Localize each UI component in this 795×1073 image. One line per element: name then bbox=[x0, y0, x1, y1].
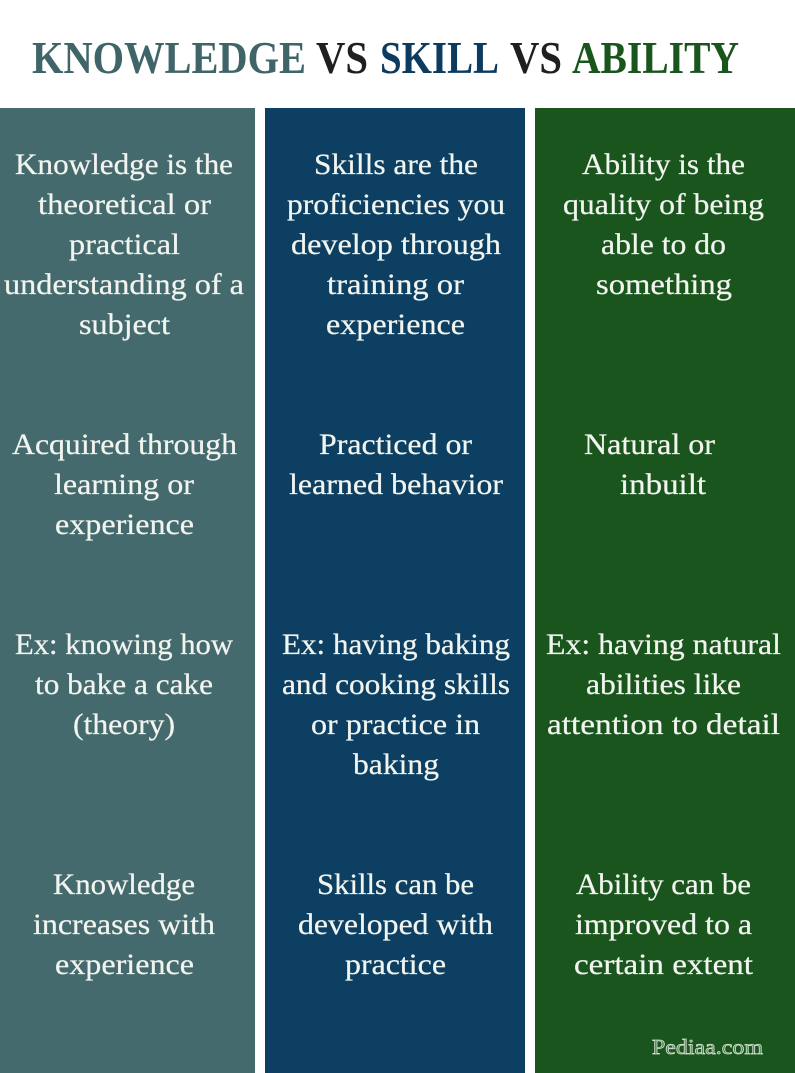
knowledge growth bbox=[33, 869, 215, 981]
ability example: abilities like bbox=[586, 669, 741, 701]
ability definition: able to do bbox=[601, 229, 726, 261]
knowledge growth: experience bbox=[55, 949, 194, 981]
knowledge acquisition bbox=[12, 429, 237, 541]
skill growth: practice bbox=[345, 949, 446, 981]
panel: skill bbox=[265, 108, 525, 1073]
knowledge definition bbox=[4, 149, 244, 341]
knowledge acquisition: learning or bbox=[54, 469, 194, 501]
ability acquisition: Natural or bbox=[584, 429, 715, 461]
panel: ability bbox=[535, 108, 795, 1073]
knowledge definition: practical bbox=[69, 229, 180, 261]
skill example bbox=[282, 629, 510, 781]
knowledge definition: understanding of a bbox=[4, 269, 244, 301]
ability definition bbox=[563, 149, 764, 301]
ability growth: Ability can be bbox=[576, 869, 751, 901]
knowledge acquisition: experience bbox=[55, 509, 194, 541]
skill growth: developed with bbox=[298, 909, 493, 941]
ability growth: improved to a bbox=[575, 909, 752, 941]
skill definition bbox=[287, 149, 505, 341]
skill example: Ex: having baking bbox=[282, 629, 510, 661]
title: ABILITY bbox=[572, 32, 739, 83]
knowledge growth: increases with bbox=[33, 909, 215, 941]
title: KNOWLEDGE bbox=[32, 32, 306, 83]
skill growth: Skills can be bbox=[317, 869, 474, 901]
watermark: Pediaa.com: Pediaa.com bbox=[652, 1035, 763, 1059]
title bbox=[32, 32, 739, 83]
skill acquisition bbox=[289, 429, 503, 501]
title: SKILL bbox=[380, 32, 499, 83]
title: VS bbox=[510, 32, 562, 83]
skill growth bbox=[298, 869, 493, 981]
skill definition: proficiencies you bbox=[287, 189, 505, 221]
knowledge definition: Knowledge is the bbox=[15, 149, 233, 181]
knowledge example: Ex: knowing how bbox=[15, 629, 234, 661]
ability definition: Ability is the bbox=[582, 149, 745, 181]
skill example: and cooking skills bbox=[282, 669, 510, 701]
skill example: baking bbox=[353, 749, 439, 781]
knowledge example: (theory) bbox=[73, 709, 175, 741]
knowledge example: to bake a cake bbox=[35, 669, 213, 701]
ability growth bbox=[574, 869, 754, 981]
knowledge example bbox=[15, 629, 234, 741]
ability example: Ex: having natural bbox=[546, 629, 781, 661]
skill acquisition: Practiced or bbox=[319, 429, 472, 461]
skill acquisition: learned behavior bbox=[289, 469, 503, 501]
knowledge definition: theoretical or bbox=[38, 189, 211, 221]
skill definition: experience bbox=[326, 309, 465, 341]
knowledge definition: subject bbox=[79, 309, 171, 341]
skill definition: develop through bbox=[291, 229, 501, 261]
skill example: or practice in bbox=[311, 709, 480, 741]
knowledge growth: Knowledge bbox=[53, 869, 195, 901]
ability example: attention to detail bbox=[547, 709, 780, 741]
panel: knowledge bbox=[0, 108, 255, 1073]
title: VS bbox=[316, 32, 368, 83]
ability acquisition bbox=[584, 429, 715, 501]
ability acquisition: inbuilt bbox=[620, 469, 707, 501]
ability growth: certain extent bbox=[574, 949, 754, 981]
ability definition: something bbox=[596, 269, 732, 301]
ability definition: quality of being bbox=[563, 189, 764, 221]
ability example bbox=[546, 629, 781, 741]
knowledge acquisition: Acquired through bbox=[12, 429, 237, 461]
skill definition: Skills are the bbox=[314, 149, 478, 181]
skill definition: training or bbox=[327, 269, 464, 301]
